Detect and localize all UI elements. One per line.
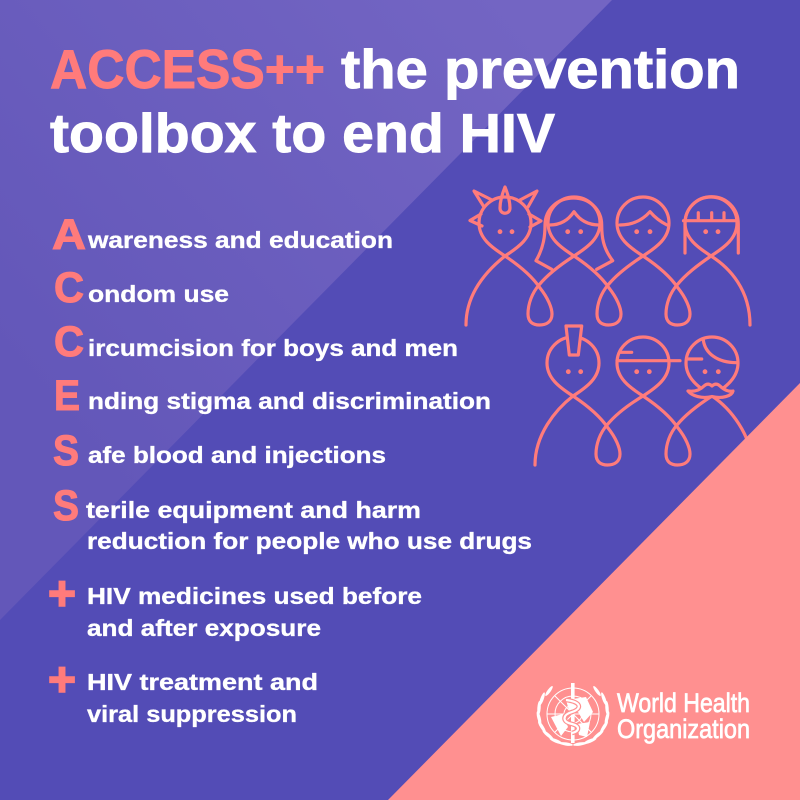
coral corner triangle <box>388 383 800 800</box>
person with mohawk <box>535 326 643 465</box>
item: awareness: A <box>52 211 86 259</box>
item: HIV medicines: + <box>48 568 76 621</box>
item: ending stigma <box>54 372 491 420</box>
item: sterile equipment: terile equipment and harm <box>86 497 421 523</box>
item: sterile equipment: reduction for people who use drugs <box>87 528 532 554</box>
item: safe blood: S <box>53 427 79 475</box>
WHO wordmark: Organization <box>617 714 750 744</box>
item: awareness <box>52 211 393 259</box>
laurel wreath <box>536 685 610 747</box>
lighter diagonal band <box>0 0 612 620</box>
item: ending stigma: nding stigma and discrimination <box>88 388 491 414</box>
person with long hair <box>536 197 643 325</box>
item: HIV medicines: HIV medicines used before <box>87 583 422 609</box>
WHO wordmark: World Health <box>617 688 750 718</box>
person with moustache <box>686 337 752 465</box>
item: safe blood: afe blood and injections <box>88 442 386 468</box>
item: HIV treatment: HIV treatment and <box>87 669 318 695</box>
title: toolbox to end HIV <box>50 102 555 164</box>
item: condom: ondom use <box>88 281 229 307</box>
WHO logo <box>536 683 750 747</box>
item: HIV treatment: viral suppression <box>87 701 297 727</box>
bottom row of people <box>535 326 752 465</box>
WHO wordmark <box>617 688 750 744</box>
top row of people <box>466 187 750 325</box>
item: HIV medicines: and after exposure <box>87 615 321 641</box>
item: condom: C <box>54 264 84 312</box>
item: circumcision <box>54 318 458 366</box>
item: HIV treatment: + <box>48 654 76 707</box>
item: circumcision: C <box>54 318 84 366</box>
people illustration <box>466 187 752 465</box>
icon: WHO emblem <box>536 683 610 747</box>
person with fringe <box>684 197 750 325</box>
item: circumcision: ircumcision for boys and men <box>88 335 458 361</box>
item: sterile equipment: S <box>53 482 79 530</box>
item: awareness: wareness and education <box>87 227 393 253</box>
title: the prevention <box>341 38 740 100</box>
item: condom <box>54 264 229 312</box>
person with spiky hair <box>466 187 574 325</box>
item: HIV treatment <box>48 654 318 727</box>
person with cap <box>617 337 712 465</box>
person with short hair <box>617 197 711 325</box>
title <box>50 38 740 164</box>
item: ending stigma: E <box>54 372 80 420</box>
ACCESS list <box>48 211 532 727</box>
item: safe blood <box>53 427 386 475</box>
staff and serpent <box>564 683 579 743</box>
title: ACCESS++ <box>50 38 325 100</box>
item: HIV medicines <box>48 568 422 641</box>
item: sterile equipment <box>53 482 532 554</box>
